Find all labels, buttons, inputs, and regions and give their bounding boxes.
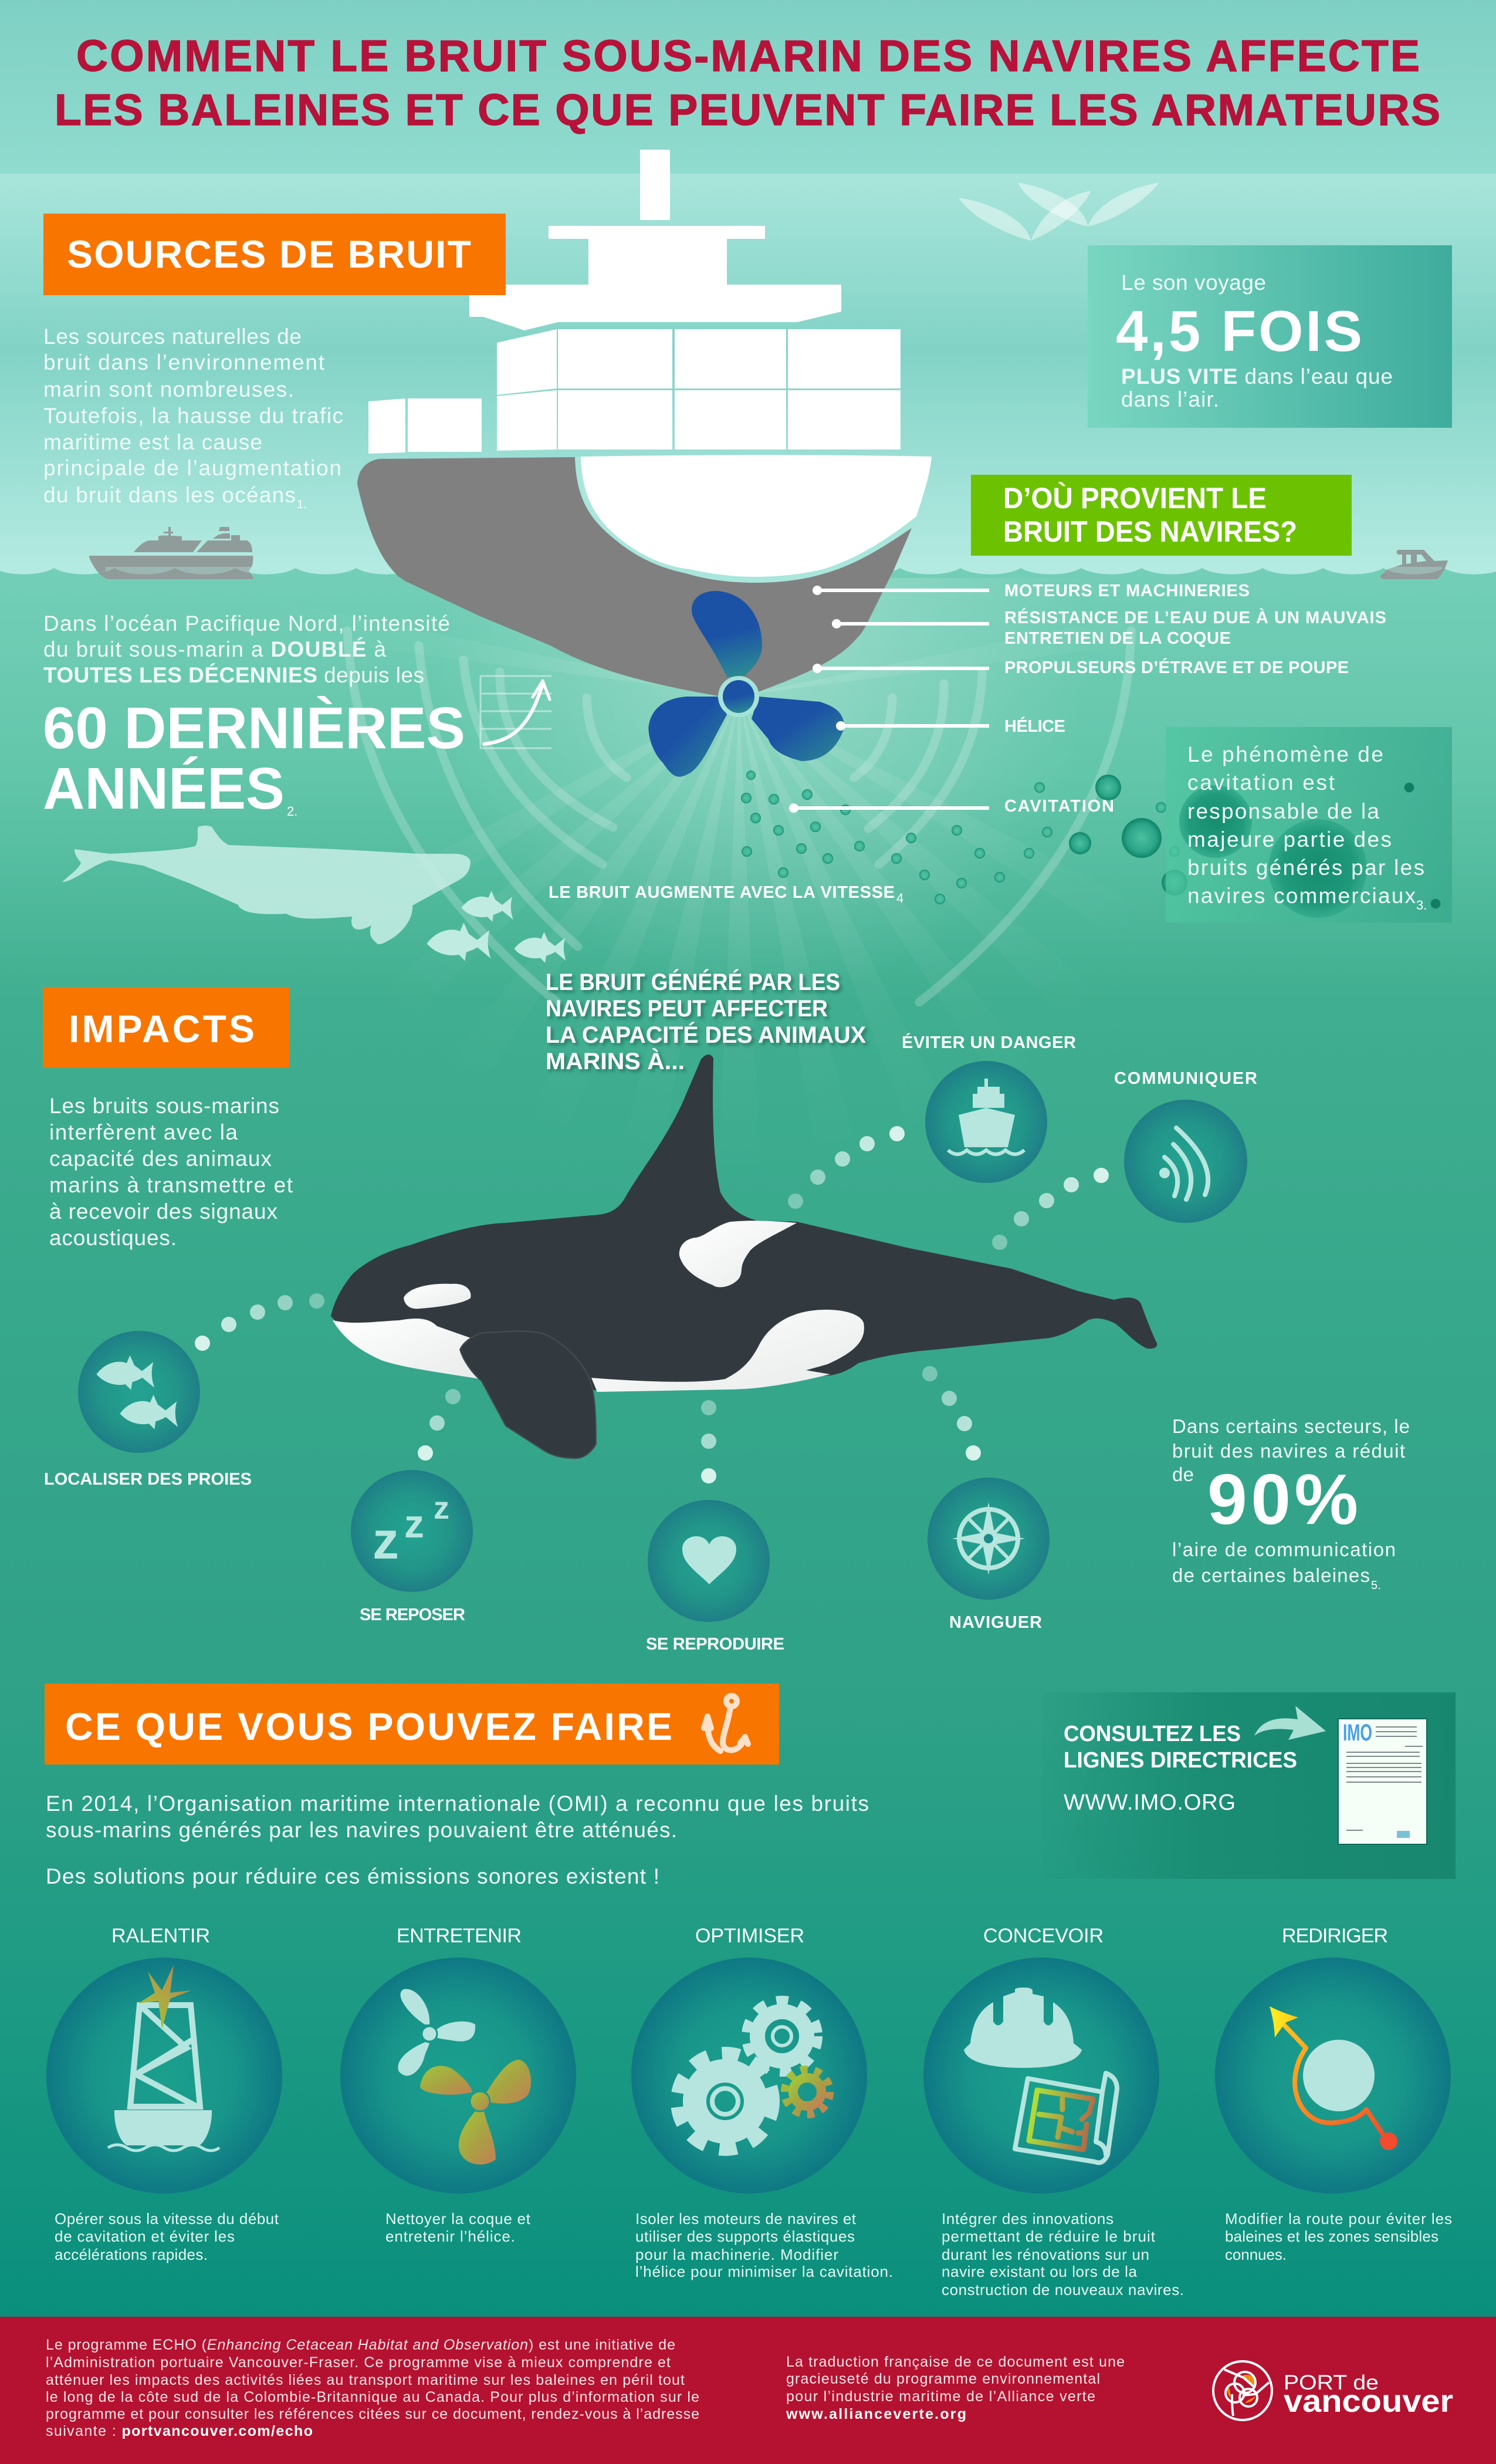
icon: reroute path xyxy=(1270,2006,1397,2150)
solution: reroute: baleines et les zones sensibles xyxy=(1225,2228,1439,2245)
stat: 90 percent xyxy=(1172,1415,1410,1592)
small cruise ship xyxy=(89,527,253,579)
callout: water resistance: RÉSISTANCE DE L’EAU DUE À UN MAUVAIS xyxy=(1004,607,1386,627)
text: natural noise sources: bruit dans l’environnement xyxy=(43,350,325,374)
panel: 4.5 times faster: 4,5 FOIS xyxy=(1116,299,1362,363)
callout: cavitation: CAVITATION xyxy=(1004,797,1114,816)
text: IMO recognition: sous-marins générés par les navires pouvaient être atténués. xyxy=(46,1818,677,1842)
icon: anchor xyxy=(704,1696,748,1751)
text: acoustic interference: capacité des animaux xyxy=(49,1147,272,1171)
footer: ECHO program: Le programme ECHO (Enhancing Cetacean Habitat and Observation) est une initiative de xyxy=(46,2337,675,2353)
text: natural noise sources: principale de l’augmentation xyxy=(43,456,341,480)
stat: 90 percent: de xyxy=(1172,1463,1194,1485)
solution: design: Intégrer des innovations xyxy=(942,2210,1113,2228)
solution: optimise xyxy=(631,1925,893,2280)
section heading: impacts: IMPACTS xyxy=(69,1007,255,1050)
callout: water resistance: ENTRETIEN DE LA COQUE xyxy=(1004,629,1231,648)
text: natural noise sources: Toutefois, la hausse du trafic xyxy=(43,404,343,428)
panel: consult guidelines: CONSULTEZ LES xyxy=(1064,1722,1241,1746)
text: acoustic interference: marins à transmettre et xyxy=(49,1173,293,1197)
text: noise doubled each decade: 60 DERNIÈRES xyxy=(43,695,465,761)
birds xyxy=(959,182,1159,241)
section heading: what you can do: CE QUE VOUS POUVEZ FAIRE xyxy=(65,1705,672,1748)
panel: consult guidelines: LIGNES DIRECTRICES xyxy=(1064,1748,1297,1773)
panel: cavitation note: navires commerciaux xyxy=(1187,884,1416,908)
dots: toward rest icon xyxy=(418,1389,461,1461)
ship bow outline xyxy=(575,457,916,583)
callout: propeller xyxy=(836,716,1065,736)
icon: rest: z xyxy=(404,1502,424,1546)
dots: toward navigation icon xyxy=(922,1366,981,1461)
icon: island xyxy=(1303,2040,1375,2111)
footer: ECHO program xyxy=(46,2337,699,2439)
dots: toward danger icon xyxy=(788,1126,905,1209)
waves xyxy=(0,563,1496,581)
panel: 4.5 times faster xyxy=(1088,245,1452,428)
panel: cavitation note: cavitation est xyxy=(1187,770,1335,795)
callout: engines: MOTEURS ET MACHINERIES xyxy=(1004,582,1250,600)
background: air xyxy=(0,174,1496,565)
solution: slow down xyxy=(46,1925,282,2263)
solution: slow down: de cavitation et éviter les xyxy=(55,2228,235,2245)
solution: reroute: REDIRIGER xyxy=(1282,1925,1388,1947)
footer: ECHO program: suivante : portvancouver.com/echo xyxy=(46,2423,313,2439)
solution: maintain xyxy=(340,1925,576,2245)
solution: maintain: entretenir l’hélice. xyxy=(385,2228,515,2245)
solution: design: navire existant ou lors de la xyxy=(942,2263,1138,2280)
heading: ship noise can affect xyxy=(546,969,866,1074)
icon: navigate xyxy=(928,1478,1050,1600)
icon: coloured propeller xyxy=(420,2060,531,2165)
footer: translation credit xyxy=(786,2354,1125,2422)
background: sea xyxy=(0,565,1496,2319)
IMO document: IMO xyxy=(1343,1720,1372,1746)
wave overlay on small vessels xyxy=(106,567,1442,580)
icon: rest: z xyxy=(373,1512,399,1570)
panel: 4.5 times faster: PLUS VITE dans l’eau que xyxy=(1121,364,1393,388)
stat: 90 percent: l’aire de communication xyxy=(1172,1539,1396,1560)
ship superstructure xyxy=(469,150,841,330)
icon: rest xyxy=(351,1470,473,1592)
propeller xyxy=(648,591,844,777)
label: noise grows with speed: 4 xyxy=(896,891,903,905)
orca body xyxy=(331,1054,1157,1390)
orca saddle patch xyxy=(679,1221,797,1287)
icon: communicate xyxy=(1124,1100,1247,1223)
label: noise grows with speed: LE BRUIT AUGMENTE AVEC LA VITESSE xyxy=(549,883,895,902)
text: noise doubled each decade: Dans l’océan Pacifique Nord, l’intensité xyxy=(43,611,450,636)
text: natural noise sources: 1. xyxy=(297,498,307,511)
solution: reroute: Modifier la route pour éviter les xyxy=(1225,2210,1452,2228)
dots: toward breeding icon xyxy=(701,1400,716,1483)
section heading: sources de bruit: SOURCES DE BRUIT xyxy=(67,232,471,276)
title: COMMENT LE BRUIT SOUS-MARIN DES NAVIRES AFFECTE xyxy=(76,31,1420,80)
title: LES BALEINES ET CE QUE PEUVENT FAIRE LES ARMATEURS xyxy=(55,85,1440,134)
panel: consult guidelines: WWW.IMO.ORG xyxy=(1064,1790,1236,1815)
footer: translation credit: La traduction française de ce document est une xyxy=(786,2354,1125,2370)
heading: where ship noise comes from xyxy=(971,475,1352,556)
icon: arrow xyxy=(1254,1706,1326,1740)
text: noise doubled each decade: 2. xyxy=(287,804,297,819)
footer: translation credit: pour l’industrie maritime de l’Alliance verte xyxy=(786,2388,1095,2405)
label: navigate: NAVIGUER xyxy=(949,1613,1042,1632)
text: noise doubled each decade: ANNÉES xyxy=(43,756,285,822)
orca xyxy=(331,1054,1157,1458)
label: avoid danger: ÉVITER UN DANGER xyxy=(902,1032,1076,1052)
stat: 90 percent: 90% xyxy=(1207,1459,1358,1539)
footer: ECHO program: l’Administration portuaire Vancouver-Fraser. Ce programme vise à mieux comprendre et xyxy=(46,2354,671,2371)
logo: Port de Vancouver: vancouver xyxy=(1284,2384,1453,2419)
icon: locate prey xyxy=(78,1331,200,1453)
text: natural noise sources: Les sources naturelles de xyxy=(43,325,302,349)
icon: breed xyxy=(648,1500,770,1622)
solution: design: permettant de réduire le bruit xyxy=(942,2228,1156,2245)
orca flipper xyxy=(460,1331,596,1458)
footer: ECHO program: atténuer les impacts des activités liées au transport maritime sur les baleines en péril tout xyxy=(46,2372,685,2388)
orca eye patch xyxy=(404,1284,471,1309)
callout: water resistance xyxy=(832,607,1386,648)
icon: rest: z xyxy=(434,1490,449,1526)
label: breed: SE REPRODUIRE xyxy=(646,1635,784,1654)
icon: blueprint xyxy=(1015,2073,1117,2163)
heading: where ship noise comes from: D’OÙ PROVIENT LE xyxy=(1003,482,1267,515)
heading: ship noise can affect: LA CAPACITÉ DES ANIMAUX xyxy=(546,1022,866,1048)
icon: avoid danger xyxy=(925,1061,1047,1183)
solution: slow down: accélérations rapides. xyxy=(55,2246,208,2263)
solution: slow down: RALENTIR xyxy=(111,1925,210,1947)
solution: optimise: Isoler les moteurs de navires et xyxy=(635,2210,857,2228)
stat: 90 percent: Dans certains secteurs, le xyxy=(1172,1415,1410,1437)
label: rest: SE REPOSER xyxy=(360,1606,465,1624)
solution: optimise: OPTIMISER xyxy=(695,1925,804,1947)
background: sky band xyxy=(0,0,1496,174)
text: noise doubled each decade: TOUTES LES DÉCENNIES depuis les xyxy=(43,663,424,687)
text: natural noise sources: marin sont nombreuses. xyxy=(43,377,294,401)
footer: translation credit: gracieuseté du programme environnemental xyxy=(786,2371,1100,2387)
panel: consult guidelines xyxy=(1042,1692,1456,1879)
solution: maintain: ENTRETENIR xyxy=(397,1925,522,1947)
footer: ECHO program: programme et pour consulter les références citées sur ce document, rendez-vous à l’adresse xyxy=(46,2406,699,2422)
fish school xyxy=(427,891,566,963)
callout: propeller: HÉLICE xyxy=(1004,716,1065,736)
panel: cavitation note xyxy=(1166,727,1452,922)
callout: thrusters xyxy=(813,657,1349,677)
panel: cavitation note: 3. xyxy=(1416,898,1427,912)
text: IMO recognition xyxy=(46,1792,869,1888)
dots: toward communication icon xyxy=(992,1168,1109,1250)
solution: optimise: l’hélice pour minimiser la cavitation. xyxy=(635,2263,893,2280)
text: acoustic interference: à recevoir des signaux xyxy=(49,1199,278,1223)
callout: engines xyxy=(813,582,1250,600)
solution: maintain: Nettoyer la coque et xyxy=(385,2210,531,2228)
stat: 90 percent: de certaines baleines xyxy=(1172,1564,1370,1586)
text: acoustic interference xyxy=(49,1094,293,1250)
callout: cavitation xyxy=(789,797,1114,816)
whale xyxy=(62,826,471,944)
icon: pale propeller xyxy=(398,1989,475,2076)
solution: design: CONCEVOIR xyxy=(983,1925,1104,1947)
text: acoustic interference: interfèrent avec la xyxy=(49,1120,238,1144)
text: natural noise sources: maritime est la cause xyxy=(43,430,262,454)
sound wave arcs xyxy=(347,631,1131,1002)
logo: Port de Vancouver: PORT de xyxy=(1284,2371,1379,2394)
stat: 90 percent: 5. xyxy=(1371,1579,1381,1592)
solution: slow down: Opérer sous la vitesse du début xyxy=(55,2210,279,2228)
dots: toward prey icon xyxy=(195,1293,324,1351)
heading: ship noise can affect: MARINS À... xyxy=(546,1048,685,1074)
ship bow xyxy=(581,455,932,577)
text: noise doubled each decade: du bruit sous-marin a DOUBLÉ à xyxy=(43,637,386,661)
stat: 90 percent: bruit des navires a réduit xyxy=(1172,1440,1405,1462)
solution: design xyxy=(923,1925,1184,2299)
icon: hard hat xyxy=(964,1988,1082,2068)
callout: thrusters: PROPULSEURS D’ÉTRAVE ET DE POUPE xyxy=(1004,657,1349,677)
section heading: what you can do xyxy=(45,1684,779,1765)
small boat xyxy=(1380,550,1448,579)
chart: rising noise xyxy=(480,676,551,748)
icon: gears xyxy=(677,2001,830,2149)
text: acoustic interference: acoustiques. xyxy=(49,1226,177,1250)
ship containers xyxy=(368,329,901,454)
text: IMO recognition: Des solutions pour réduire ces émissions sonores existent ! xyxy=(46,1864,659,1888)
panel: cavitation note: bruits générés par les xyxy=(1187,856,1424,880)
solution: optimise: pour la machinerie. Modifier xyxy=(635,2246,838,2263)
heading: ship noise can affect: LE BRUIT GÉNÉRÉ PAR LES xyxy=(546,969,840,995)
cavitation bubbles xyxy=(741,770,1441,918)
sound rays from propeller xyxy=(279,578,1200,1164)
solution: design: durant les rénovations sur un xyxy=(942,2246,1149,2263)
solution: design: construction de nouveaux navires. xyxy=(942,2281,1184,2299)
footer: translation credit: www.allianceverte.org xyxy=(786,2406,966,2422)
panel: 4.5 times faster: dans l’air. xyxy=(1121,387,1219,411)
icon: buoy xyxy=(108,1965,219,2151)
solution: reroute xyxy=(1215,1925,1452,2263)
panel: cavitation note: Le phénomène de xyxy=(1187,742,1383,766)
text: acoustic interference: Les bruits sous-marins xyxy=(49,1094,279,1118)
title xyxy=(55,31,1440,134)
solution: reroute: connues. xyxy=(1225,2246,1287,2263)
heading: where ship noise comes from: BRUIT DES NAVIRES? xyxy=(1003,515,1297,548)
panel: cavitation note: majeure partie des xyxy=(1187,827,1392,851)
logo: Port de Vancouver xyxy=(1213,2361,1453,2420)
label: locate prey: LOCALISER DES PROIES xyxy=(44,1470,252,1489)
solution: optimise: utiliser des supports élastiques xyxy=(635,2228,855,2245)
footer xyxy=(0,2317,1496,2464)
heading: ship noise can affect: NAVIRES PEUT AFFECTER xyxy=(546,996,828,1022)
panel: cavitation note: responsable de la xyxy=(1187,799,1379,823)
orca belly xyxy=(333,1319,487,1380)
text: natural noise sources: du bruit dans les océans xyxy=(43,483,296,507)
text: noise doubled each decade xyxy=(43,611,465,822)
text: IMO recognition: En 2014, l’Organisation maritime internationale (OMI) a reconnu que les bruits xyxy=(46,1792,869,1816)
panel: 4.5 times faster: Le son voyage xyxy=(1121,271,1266,295)
text: natural noise sources xyxy=(43,325,343,511)
label: communicate: COMMUNIQUER xyxy=(1114,1069,1257,1088)
IMO document xyxy=(1338,1719,1427,1844)
ship xyxy=(357,150,932,697)
footer: ECHO program: le long de la côte sud de la Colombie-Britannique au Canada. Pour plus d’information sur le xyxy=(46,2389,699,2405)
section heading: impacts xyxy=(43,987,289,1068)
section heading: sources de bruit xyxy=(43,214,506,295)
ship hull xyxy=(357,457,932,697)
